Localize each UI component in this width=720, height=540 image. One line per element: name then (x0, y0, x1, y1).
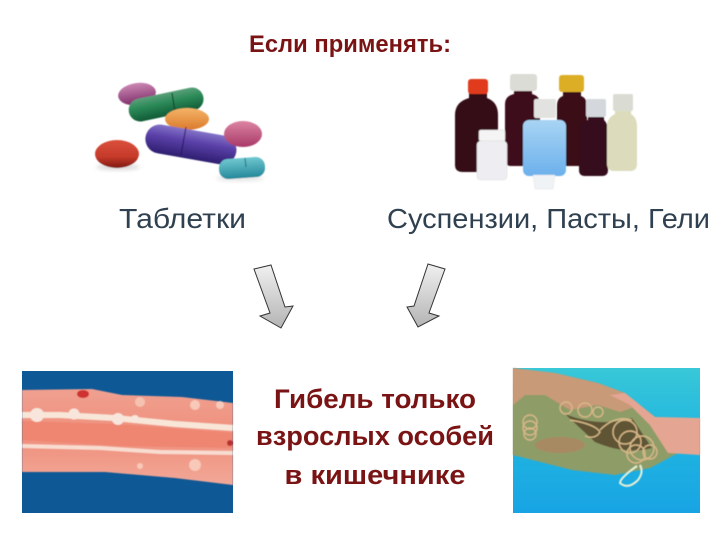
title: Если применять: (249, 31, 451, 58)
text: result: в кишечнике (284, 460, 466, 490)
arrow: right (407, 264, 445, 327)
label: tablets: Таблетки (119, 203, 246, 234)
photo: intestine with flat worms (22, 371, 233, 513)
photo: intestine with round worms (513, 368, 700, 513)
image: bottles (455, 74, 637, 189)
image: tablets and capsules (95, 80, 266, 181)
text: result: взрослых особей (256, 421, 494, 451)
text: result (256, 384, 494, 490)
arrow: left (254, 265, 293, 328)
text: result: Гибель только (274, 384, 476, 414)
label: suspensions: Суспензии, Пасты, Гели (387, 203, 710, 234)
